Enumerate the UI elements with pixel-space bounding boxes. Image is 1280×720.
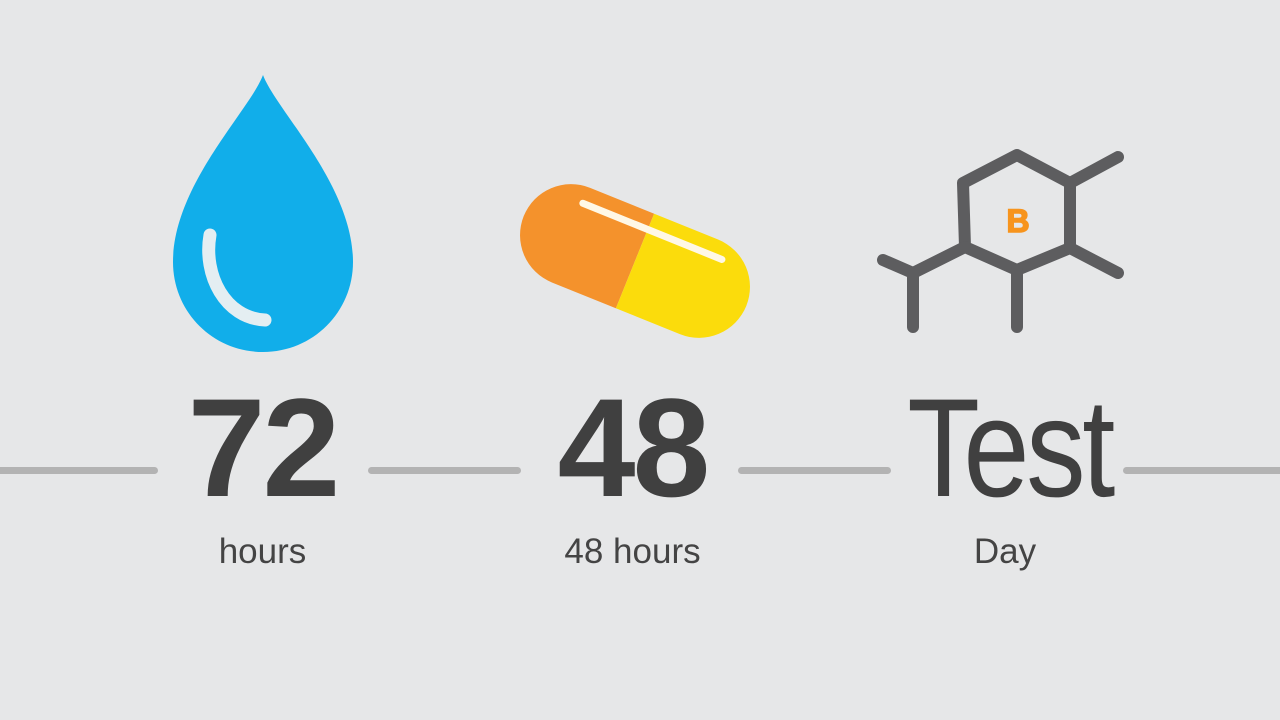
icon: capsule pill (520, 184, 750, 338)
stat 1: 72 hours: 72 (188, 369, 337, 526)
icon: water drop (173, 75, 353, 352)
stat 3: Test Day: Day (974, 532, 1036, 571)
stat 2: 48 hours: 48 hours (564, 532, 701, 571)
stat 3: Test Day: Test (907, 369, 1112, 526)
icon: molecule with B: B (1006, 203, 1030, 239)
stat 1: 72 hours: hours (219, 532, 306, 571)
icon: molecule with B (877, 149, 1124, 333)
stat 2: 48 hours: 48 (558, 369, 707, 526)
